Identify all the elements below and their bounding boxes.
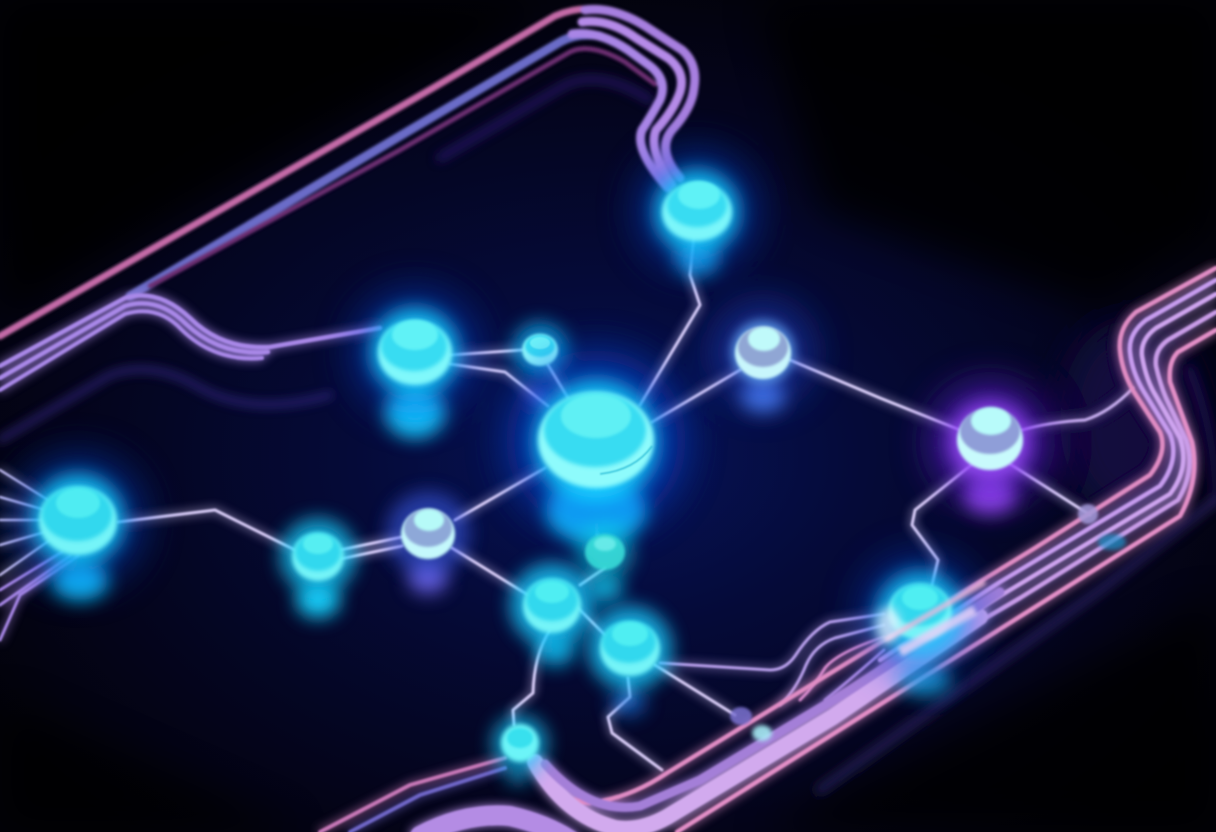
upper pink blue and violet traces [0,9,695,336]
small dim nodes near traces [730,504,1126,741]
wiring between nodes [118,235,1133,770]
node: small upper [512,322,568,378]
node: pale right violet [930,382,1050,502]
node: upper left [353,290,477,414]
node: pale centre left [386,491,470,575]
node: far left [12,454,144,586]
node: lower right of centre [588,606,672,690]
node: lower centre [510,563,594,647]
node: pale upper right [711,300,815,404]
node: right lower under traces [858,553,985,677]
node: below hub [577,524,633,580]
right and lower violet-pink traces [533,268,1216,832]
node: bottom small [492,715,548,771]
node: top [637,150,757,270]
node: left middle [280,518,356,594]
floor reflections of nodes [52,240,1016,784]
node: central hub [506,350,686,530]
bottom left traces [320,758,570,832]
left violet traces [0,296,380,640]
